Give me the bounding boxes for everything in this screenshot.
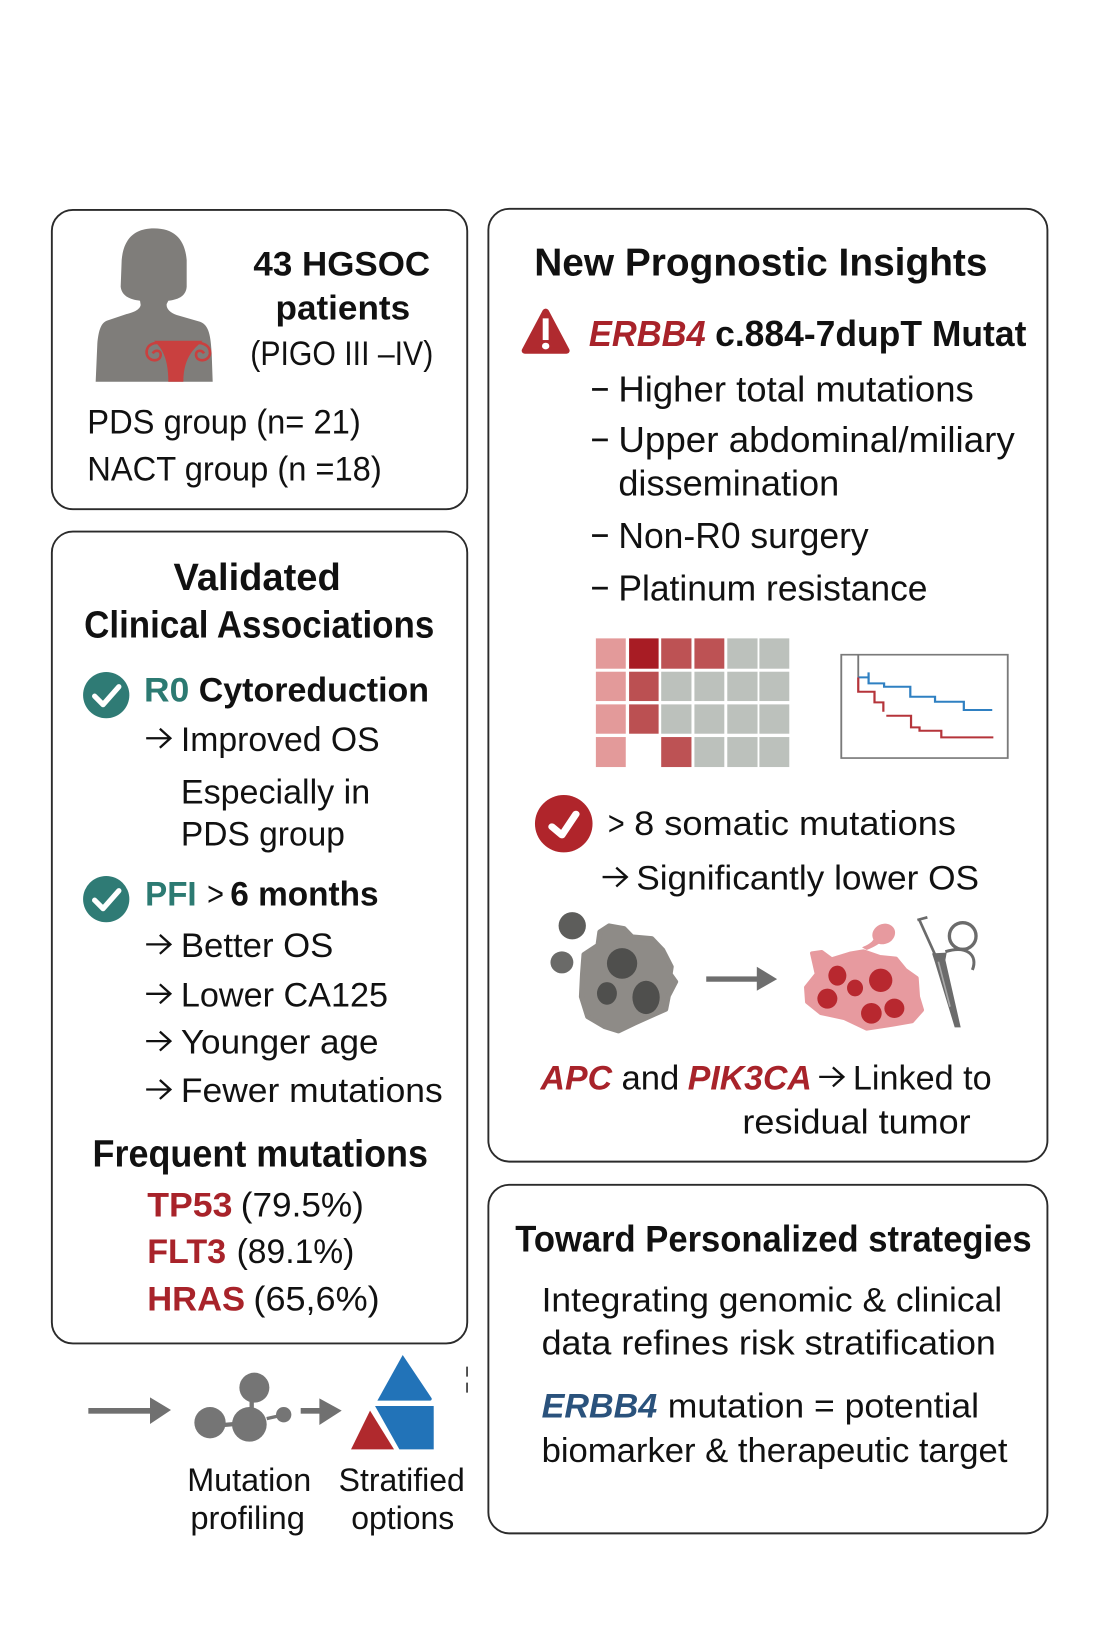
- text: R0 cytoreduction: Improved OS: [181, 721, 380, 759]
- heading: cohort size: 43 HGSOC: [253, 246, 430, 284]
- chart: survival curves: [841, 655, 1008, 758]
- label: stratified options: [339, 1461, 465, 1536]
- arrow: to stratified options: [301, 1398, 342, 1425]
- text: groups: PDS group (n= 21): [87, 403, 361, 441]
- list: ERBB4 associations: dissemination: [618, 463, 839, 503]
- text: integrating data: [542, 1281, 1002, 1362]
- heading: validated clinical associations: [84, 557, 434, 646]
- text: APC and PIK3CA: and: [622, 1059, 679, 1097]
- list: ERBB4 associations: [592, 370, 1015, 608]
- text: APC and PIK3CA: PIK3CA: [688, 1059, 812, 1097]
- text: PFI over 6 months: Fewer mutations: [181, 1072, 443, 1110]
- heading: validated clinical associations: Clinical Associations: [84, 604, 434, 646]
- text: PFI over 6 months: Younger age: [181, 1024, 379, 1062]
- list: ERBB4 associations: Platinum resistance: [618, 568, 928, 608]
- text: R0 cytoreduction: [144, 671, 429, 854]
- text: PFI over 6 months: Lower CA125: [181, 976, 388, 1014]
- panel: workflow icons: [88, 1355, 467, 1536]
- list: ERBB4 associations: Non-R0 surgery: [618, 516, 869, 556]
- heading: cohort size: patients: [276, 290, 410, 328]
- text: PFI over 6 months: [145, 875, 443, 1110]
- icon: mutation network: [194, 1373, 291, 1442]
- heading: cohort size: (PIGO III –IV): [250, 335, 433, 373]
- panel: toward personalized strategies: [488, 1185, 1047, 1533]
- text: PFI over 6 months: Better OS: [181, 927, 333, 965]
- text: ERBB4 mutation heading: ERBB4: [589, 314, 706, 354]
- icon: grey tumor: [550, 912, 676, 1031]
- panel: patient cohort: [52, 210, 467, 509]
- text: integrating data: data refines risk stratification: [542, 1324, 996, 1362]
- list: mutation frequencies: TP53: [147, 1187, 232, 1225]
- text: R0 cytoreduction: R0: [144, 671, 189, 709]
- panel: validated clinical associations: [52, 532, 467, 1343]
- list: mutation frequencies: (79.5%): [241, 1187, 364, 1225]
- heading: new prognostic insights: New Prognostic Insights: [534, 242, 987, 285]
- text: integrating data: Integrating genomic & clinical: [542, 1281, 1002, 1319]
- arrow: to mutation profiling: [88, 1397, 171, 1424]
- text: R0 cytoreduction: Especially in: [181, 773, 370, 811]
- text: somatic mutations and OS: Significantly lower OS: [636, 860, 979, 898]
- label: stratified options: Stratified: [339, 1461, 465, 1498]
- text: PFI over 6 months: 6 months: [230, 875, 379, 913]
- text: ERBB4 biomarker: mutation = potential: [668, 1388, 979, 1426]
- icon: stratified shapes: [351, 1355, 467, 1449]
- text: PFI over 6 months: PFI: [145, 875, 197, 913]
- icon: teal check: [83, 876, 129, 922]
- list: ERBB4 associations: Upper abdominal/miliary: [618, 420, 1015, 460]
- text: somatic mutations and OS: 8 somatic mutations: [634, 805, 956, 843]
- text: PFI over 6 months: >: [207, 875, 224, 913]
- text: APC and PIK3CA: residual tumor: [742, 1104, 971, 1142]
- icon: teal check: [83, 672, 129, 718]
- text: R0 cytoreduction: PDS group: [181, 816, 345, 854]
- text: somatic mutations and OS: >: [608, 805, 625, 843]
- icon: red check: [535, 795, 593, 852]
- label: stratified options: options: [351, 1499, 454, 1536]
- text: APC and PIK3CA: APC: [540, 1059, 613, 1097]
- text: ERBB4 mutation heading: c.884-7dupT Mutat: [715, 314, 1026, 354]
- text: R0 cytoreduction: Cytoreduction: [199, 671, 429, 709]
- text: APC and PIK3CA: [540, 1059, 992, 1142]
- label: mutation profiling: Mutation: [187, 1461, 311, 1498]
- list: ERBB4 associations: Higher total mutations: [618, 370, 974, 410]
- heading: frequent mutations: Frequent mutations: [93, 1133, 428, 1175]
- list: mutation frequencies: FLT3: [147, 1233, 226, 1271]
- text: ERBB4 biomarker: ERBB4: [542, 1388, 657, 1426]
- heading: cohort size: [250, 246, 433, 373]
- label: mutation profiling: [187, 1461, 311, 1536]
- text: APC and PIK3CA: Linked to: [853, 1059, 992, 1097]
- label: mutation profiling: profiling: [190, 1499, 305, 1536]
- icon: surgical forceps: [917, 917, 976, 1027]
- heading: validated clinical associations: Validated: [174, 557, 341, 599]
- heading: toward personalized strategies: Toward Personalized strategies: [515, 1218, 1032, 1259]
- chart: mutation heatmap: [596, 638, 789, 767]
- icon: warning triangle: [525, 312, 566, 351]
- text: groups: [87, 403, 382, 489]
- panel: new prognostic insights: [488, 209, 1047, 1162]
- list: mutation frequencies: (89.1%): [237, 1233, 354, 1271]
- list: mutation frequencies: [147, 1187, 380, 1318]
- text: ERBB4 biomarker: [542, 1388, 1008, 1470]
- text: somatic mutations and OS: [603, 805, 979, 898]
- icon: pink tumor: [806, 920, 922, 1029]
- icon: patient silhouette with uterus: [96, 228, 213, 382]
- arrow: tumor progression: [706, 967, 777, 991]
- list: mutation frequencies: HRAS: [147, 1280, 245, 1318]
- text: groups: NACT group (n =18): [87, 451, 382, 489]
- list: mutation frequencies: (65,6%): [253, 1280, 380, 1318]
- text: ERBB4 biomarker: biomarker & therapeutic target: [542, 1432, 1008, 1470]
